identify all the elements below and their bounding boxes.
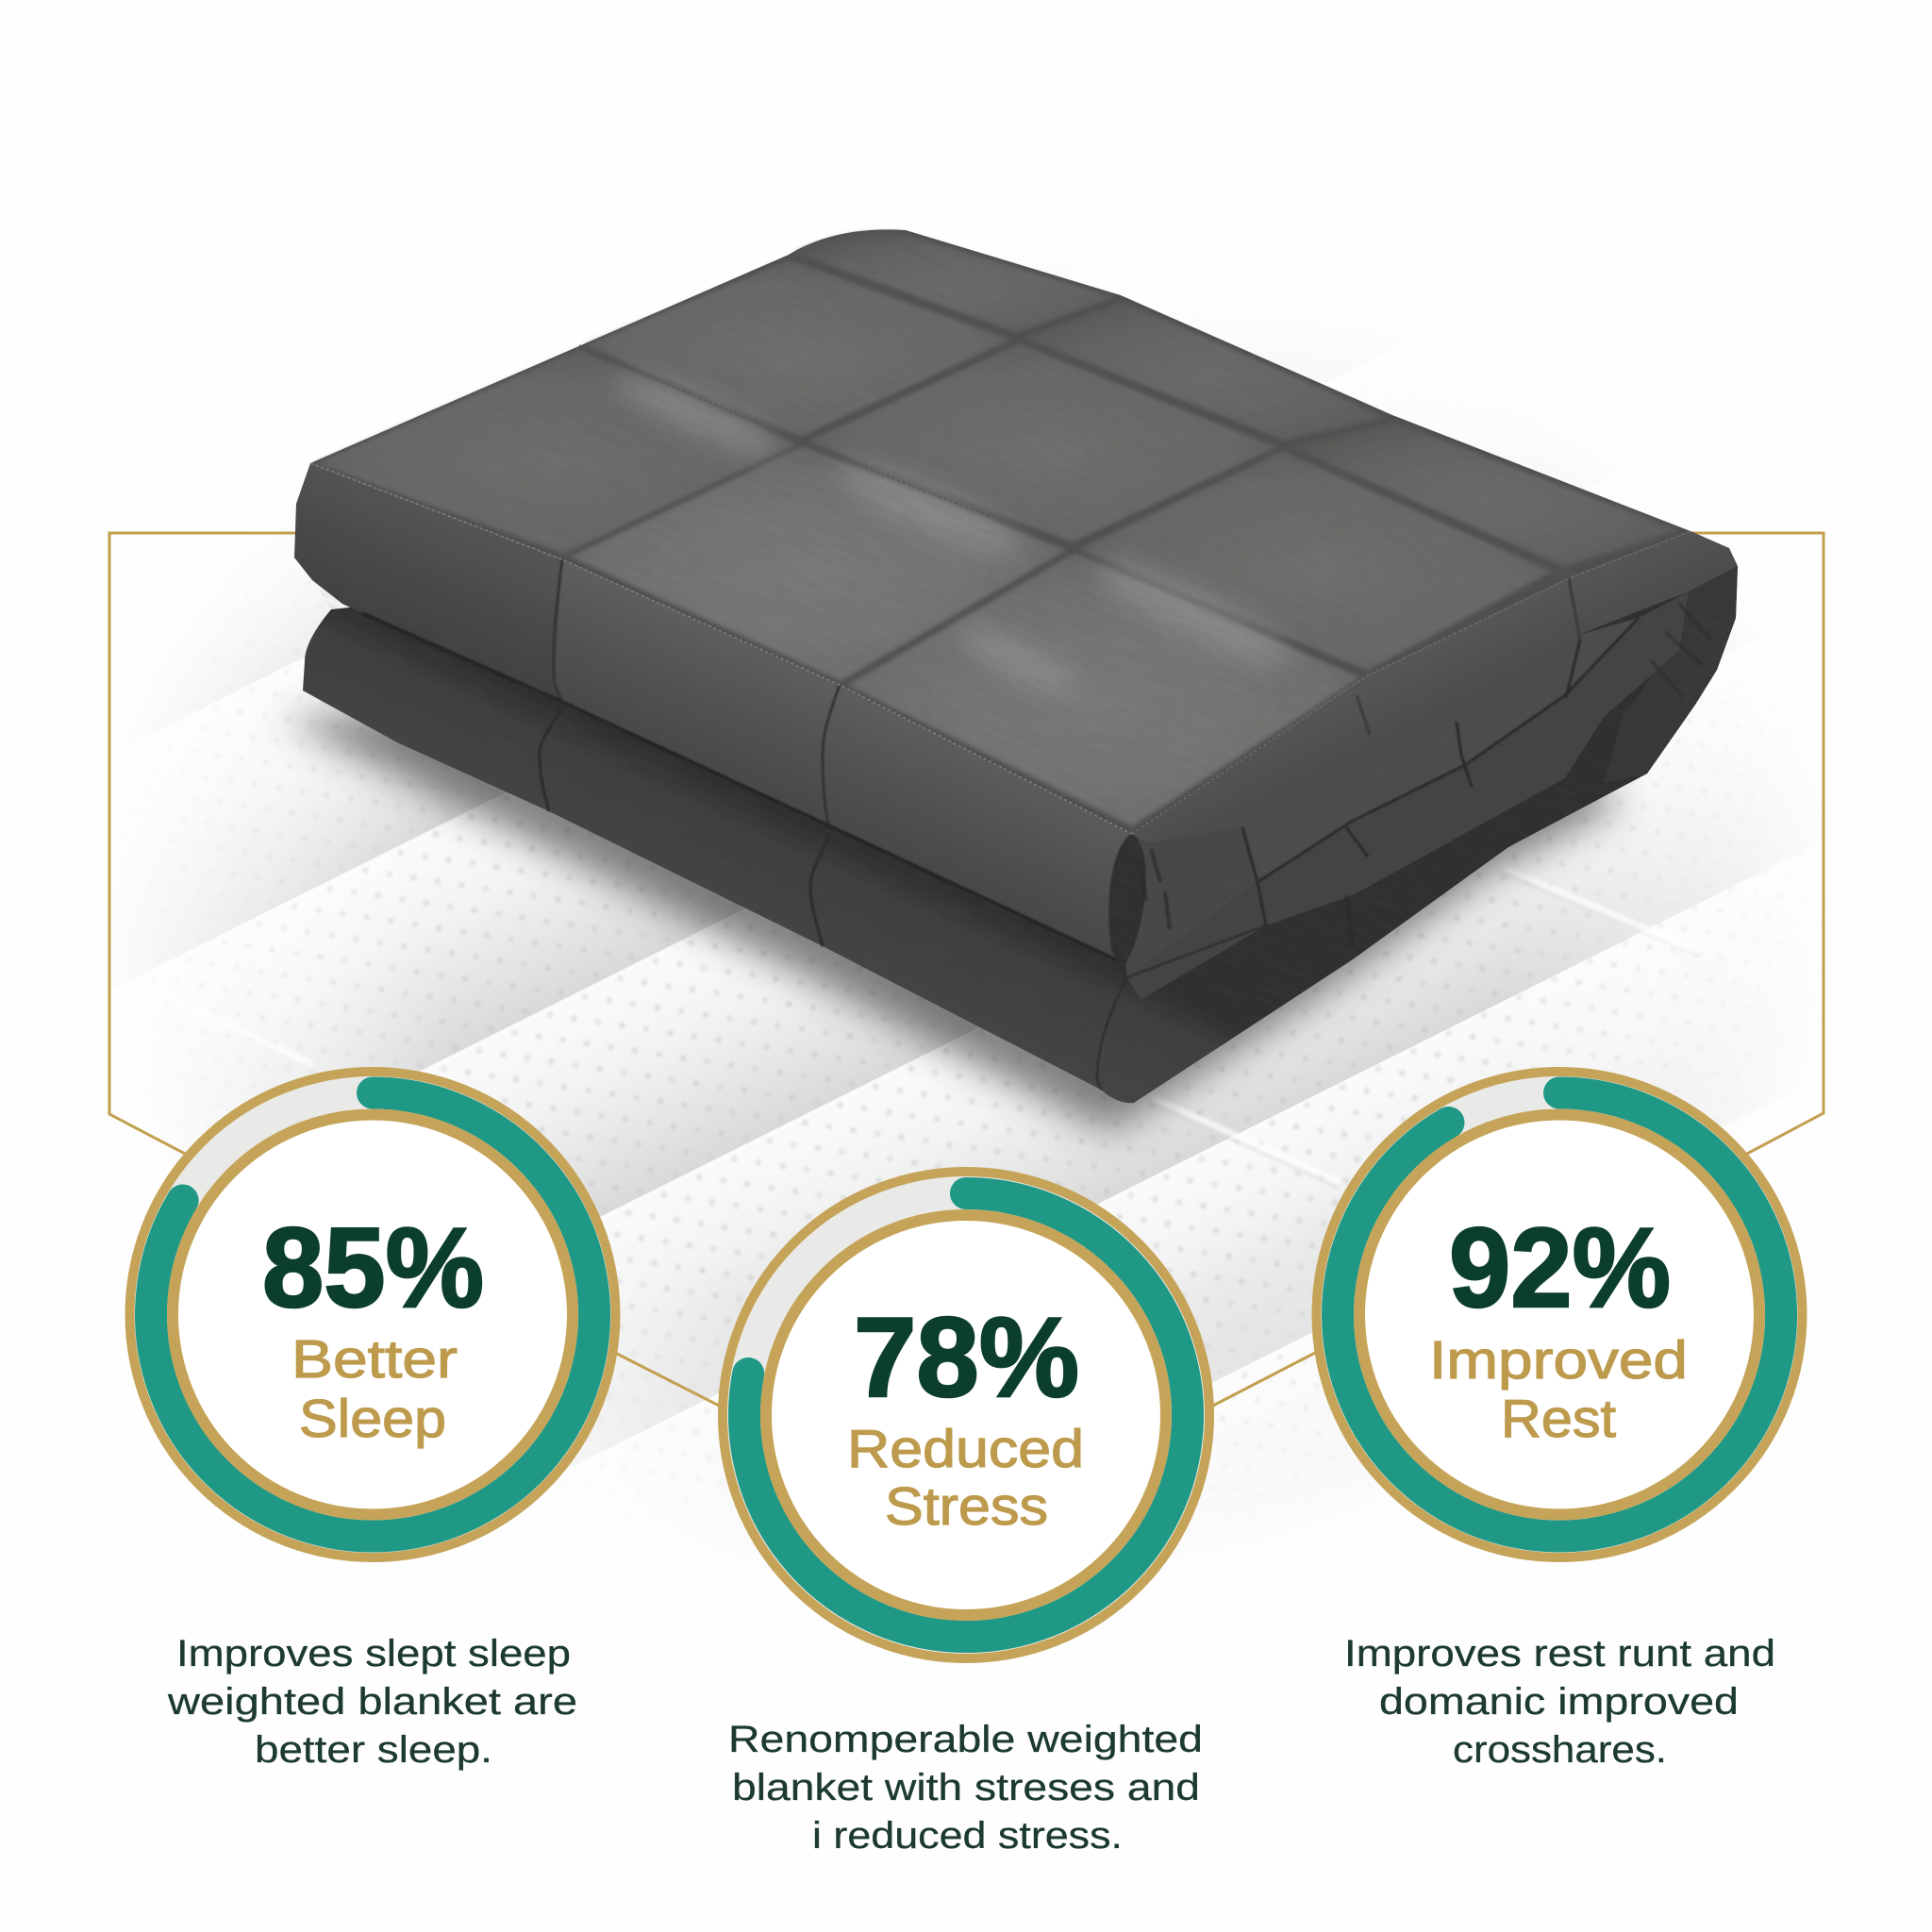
progress arc 85: [151, 1092, 594, 1536]
stat ring: 78% reduced stress: [723, 1172, 1209, 1658]
blanket top highlights: [608, 361, 1301, 705]
stat ring: 85% better sleep: [130, 1072, 615, 1557]
blanket second fold ridge: [1242, 618, 1639, 882]
blanket upper front panels: [294, 463, 1132, 964]
label improved rest: Rest: [1501, 1389, 1616, 1449]
progress arc 92: [1338, 1092, 1781, 1536]
description: reduced stress: blanket with streses and: [732, 1767, 1200, 1808]
blanket rounded fold strip: [1132, 531, 1738, 843]
label reduced stress: Stress: [885, 1476, 1048, 1537]
blanket left front panel shade: [294, 463, 562, 702]
description: reduced stress: i reduced stress.: [812, 1815, 1123, 1857]
description: better sleep: Improves slept sleep: [176, 1633, 571, 1674]
blanket lower layer: [303, 566, 1738, 1103]
weighted blanket illustration: [156, 0, 1868, 1404]
value 78%: 78%: [854, 1294, 1079, 1421]
blanket cast shadow: [282, 689, 1626, 1131]
background: quilted white mattress: [160, 580, 1779, 1489]
blanket fold creases: [1097, 578, 1712, 1090]
description: better sleep: better sleep.: [255, 1729, 492, 1771]
blanket stitch lines: [310, 255, 1690, 834]
blanket lower divider seams: [540, 708, 830, 946]
progress arc 78: [744, 1193, 1188, 1637]
value 92%: 92%: [1449, 1205, 1671, 1331]
label better sleep: Better: [291, 1329, 458, 1390]
blanket top face base: [310, 229, 1690, 834]
label better sleep: Sleep: [299, 1389, 446, 1449]
blanket front divider seams: [362, 559, 1132, 964]
gold frame connector lines: [109, 533, 1824, 1407]
description: improved rest: crosshares.: [1453, 1729, 1667, 1771]
stat ring: 92% improved rest: [1317, 1072, 1802, 1557]
blanket end face of upper layer: [1125, 827, 1257, 977]
label improved rest: Improved: [1429, 1330, 1688, 1391]
description: improved rest: Improves rest runt and: [1344, 1633, 1775, 1674]
label reduced stress: Reduced: [847, 1419, 1084, 1479]
description: improved rest: domanic improved: [1379, 1681, 1739, 1723]
value 85%: 85%: [262, 1205, 484, 1331]
blanket fabric texture: [319, 591, 340, 609]
description: better sleep: weighted blanket are: [167, 1681, 577, 1723]
description: reduced stress: Renomperable weighted: [728, 1719, 1203, 1760]
blanket top quilted cells: [315, 232, 1679, 826]
blanket third fold ridge: [1127, 591, 1689, 1000]
blanket dark pleated roll end: [1604, 566, 1738, 783]
